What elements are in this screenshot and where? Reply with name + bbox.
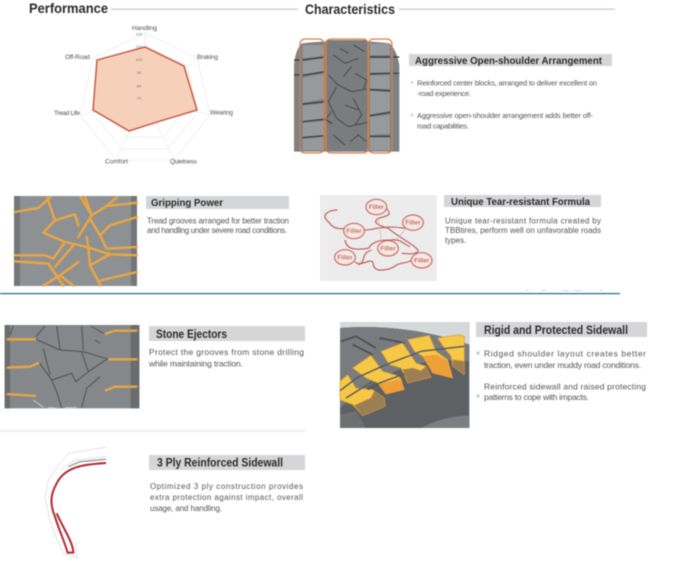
bullets	[476, 348, 646, 402]
bullets: Ridged shoulder layout creates better	[484, 348, 646, 358]
header bar: Gripping Power	[151, 197, 223, 209]
axis ticks	[136, 32, 143, 100]
axis ticks: 90	[137, 70, 142, 75]
bullets: -road experience.	[417, 89, 471, 98]
axis labels: Wearing	[210, 110, 233, 116]
panel: stone ejectors	[148, 326, 305, 368]
axis ticks: 120	[136, 32, 143, 36]
axis labels: Off-Road	[65, 54, 90, 61]
body text: Optimized 3 ply construction provides	[150, 482, 303, 491]
bullets: patterns to cope with impacts.	[484, 392, 589, 402]
body text	[445, 216, 601, 245]
diagram: filler molecule network: Filler	[405, 220, 421, 227]
body text	[148, 347, 304, 368]
header bar: Unique Tear-resistant Formula	[451, 196, 590, 208]
bullets: traction, even under muddy road conditions.	[484, 360, 641, 370]
axis ticks: 110	[136, 44, 143, 49]
panel: unique tear-resistant formula	[444, 195, 601, 245]
diagram: filler molecule network: Filler	[414, 257, 430, 264]
bullets: Aggressive open-shoulder arrangement adds better off-	[417, 111, 594, 120]
body text: Tread grooves arranged for better traction	[147, 216, 289, 226]
divider line	[0, 430, 305, 432]
axis labels: Tread Life	[54, 110, 80, 117]
data polygon	[93, 47, 197, 131]
panel: gripping power	[146, 196, 289, 235]
diagram: filler molecule network: Filler	[369, 204, 384, 211]
image: gripping power tread	[14, 196, 137, 286]
body text	[150, 482, 303, 513]
image: rigid sidewall shoulder	[340, 322, 469, 428]
header bar: 3 Ply Reinforced Sidewall	[157, 458, 283, 470]
header bar: Rigid and Protected Sidewall	[484, 323, 628, 337]
diagram: filler molecule network: Filler	[346, 228, 362, 235]
axis labels: Braking	[197, 54, 218, 61]
axis ticks: 100	[136, 57, 143, 62]
axis labels: Comfort	[105, 158, 128, 166]
body text: types.	[445, 236, 466, 245]
bullets: road capabilities.	[417, 122, 469, 130]
heading: Characteristics: Characteristics	[305, 1, 395, 17]
body text: and handling under severe road conditions.	[147, 226, 287, 235]
radar chart: performance	[54, 25, 233, 166]
panel: rigid and protected sidewall	[476, 322, 647, 402]
bullets	[411, 78, 597, 130]
body text	[147, 216, 289, 235]
body text: Protect the grooves from stone drilling	[149, 347, 304, 357]
bullets: Reinforced center blocks, arranged to deliver excellent on	[417, 78, 597, 88]
diagram: filler molecule network: Filler	[380, 245, 396, 252]
diagram: filler molecule network: Filler	[337, 254, 353, 261]
header bar	[149, 326, 305, 341]
body text: while maintaining traction.	[148, 358, 243, 368]
axis labels	[54, 25, 233, 166]
axis labels: Handling	[132, 25, 157, 32]
header bar: Stone Ejectors	[156, 329, 227, 341]
heading: Performance: Performance	[29, 0, 108, 16]
diagram: filler molecule network	[320, 195, 437, 281]
image: tire tread with highlighted zones	[294, 39, 399, 153]
divider line	[0, 293, 620, 294]
axis labels: Quietness	[170, 158, 198, 166]
image: stone ejectors tread	[5, 325, 139, 408]
panel: 3 ply reinforced sidewall	[149, 455, 305, 513]
bullets: Reinforced sidewall and raised protecting	[484, 382, 646, 392]
body text: usage, and handling.	[150, 504, 222, 513]
header bar: Aggressive Open-shoulder Arrangement	[415, 55, 602, 67]
body text: Unique tear-resistant formula created by	[445, 216, 601, 226]
panel: aggressive open-shoulder arrangement	[409, 54, 612, 130]
axis ticks: 80	[137, 84, 142, 88]
axis ticks: 70	[137, 96, 142, 100]
diagram: 3 ply sidewall cross-section	[45, 447, 106, 558]
body text: TBBtires, perform well on unfavorable roads	[445, 226, 601, 235]
body text: extra protection against impact, overall	[150, 493, 303, 502]
header bar	[146, 196, 289, 209]
